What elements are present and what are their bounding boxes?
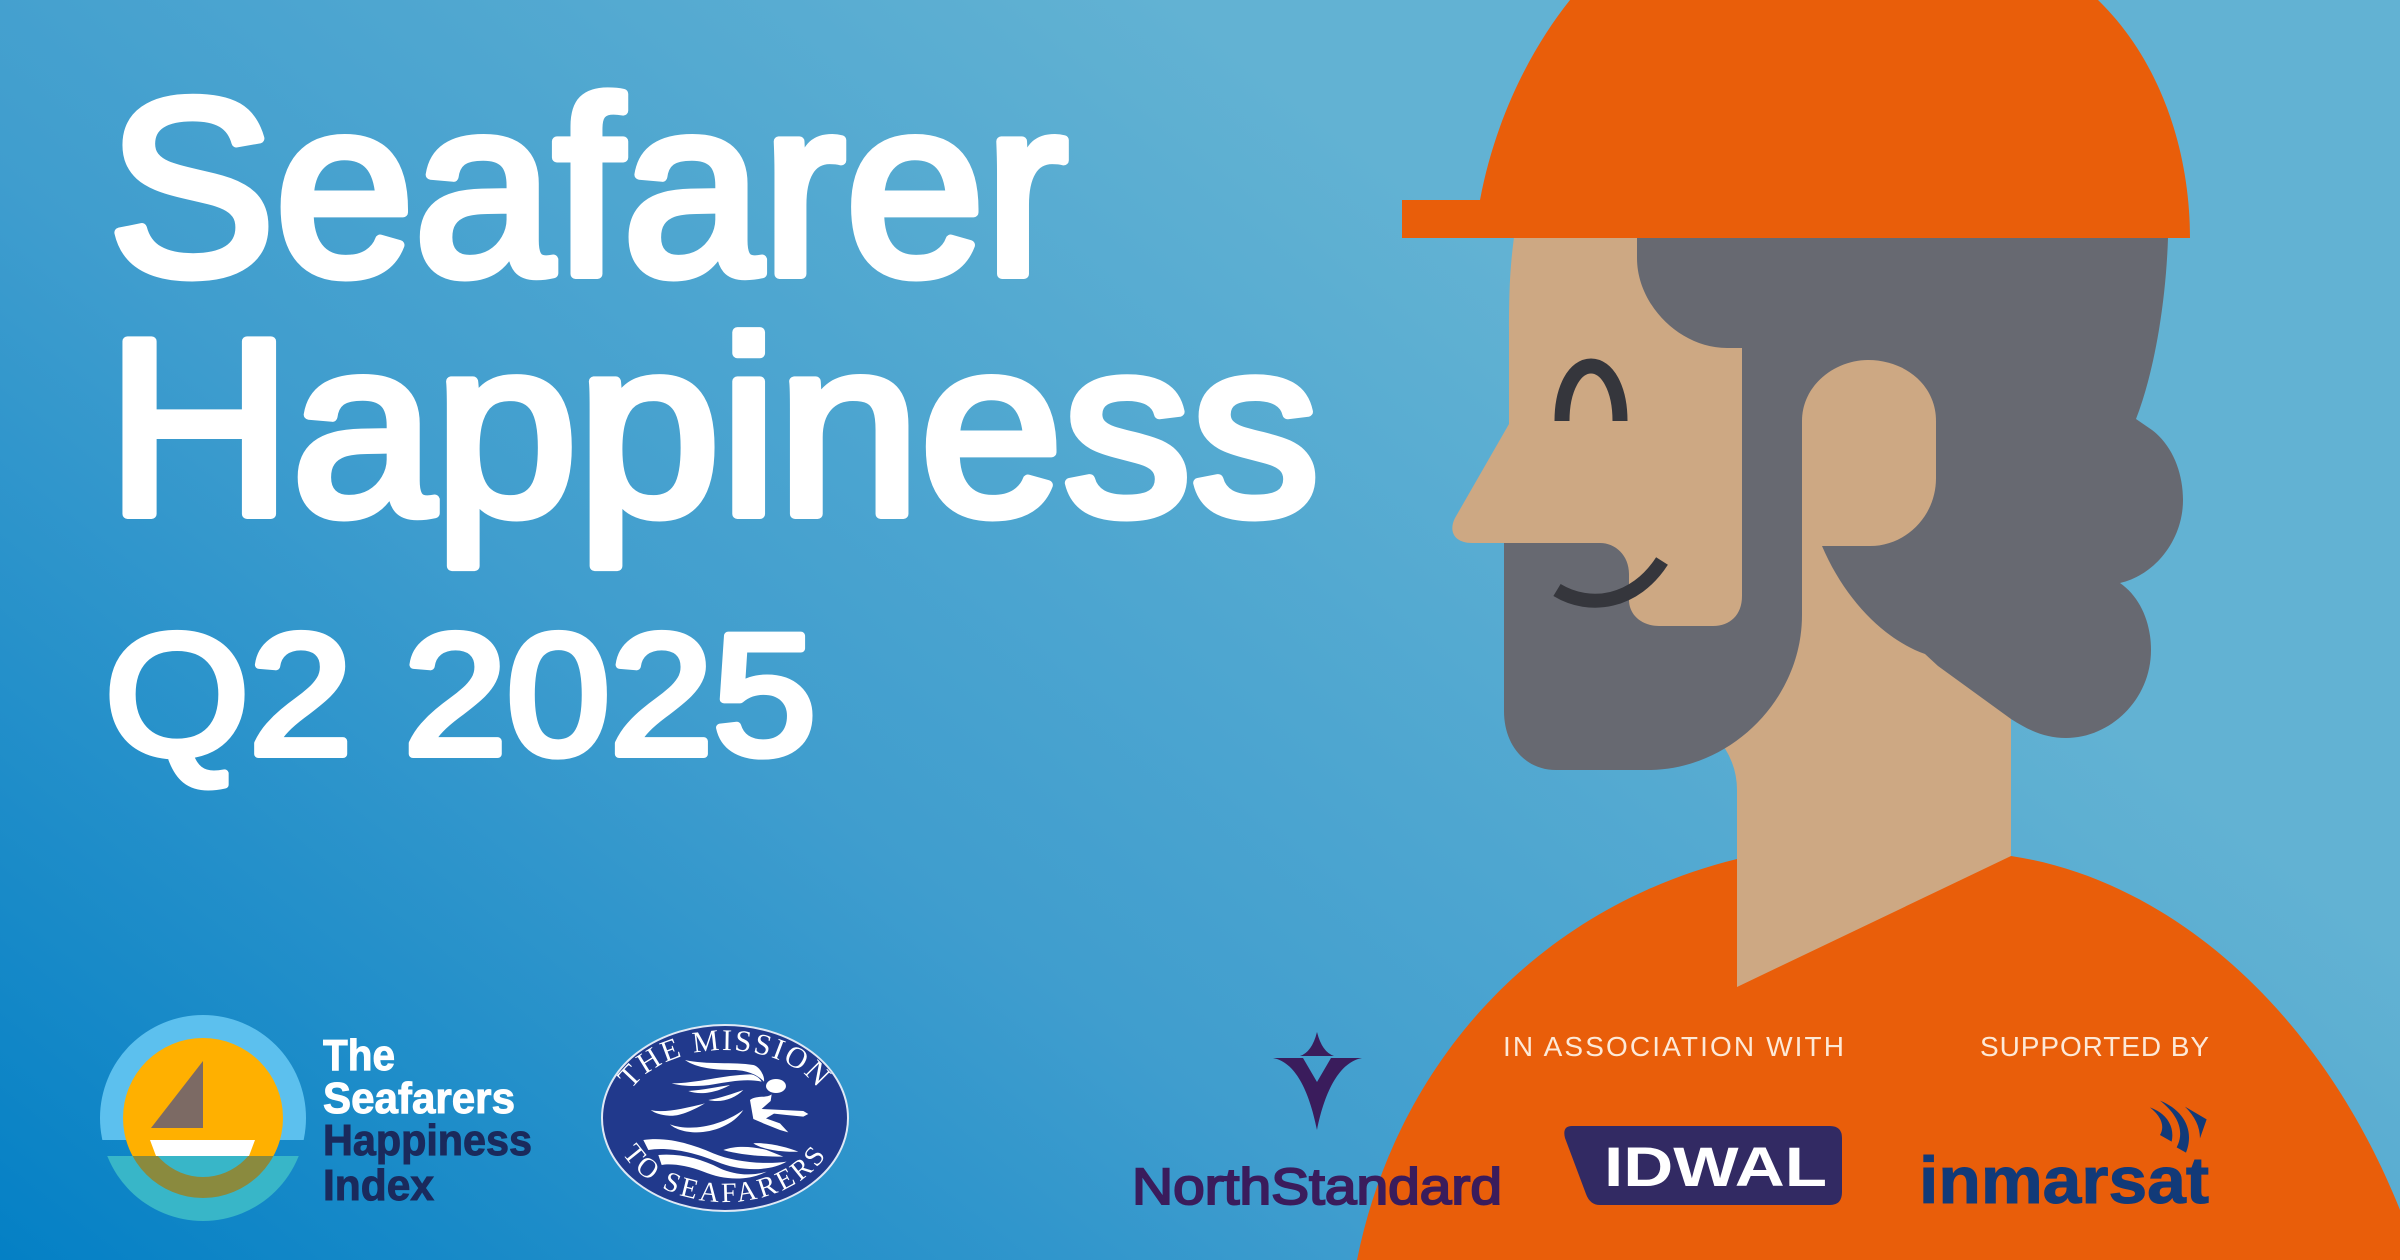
label: supported by: SUPPORTED BY <box>1980 1031 2209 1062</box>
hard hat <box>1402 0 2190 238</box>
logo wordmark: The <box>323 1031 395 1080</box>
title line: Seafarer: Seafarer <box>108 48 1068 328</box>
shirt <box>1357 856 2400 1260</box>
ear <box>1802 360 1936 546</box>
title line: Happiness: Happiness <box>106 288 1320 568</box>
logo wordmark: Seafarers <box>323 1074 515 1123</box>
NorthStandard wordmark: NorthStandard <box>1132 1158 1502 1215</box>
logo emblem: sailboat <box>100 1015 306 1221</box>
hair and beard <box>1504 230 2183 770</box>
flying angel emblem <box>643 1060 808 1179</box>
neck <box>1715 530 2011 987</box>
NorthStandard star <box>1273 1032 1362 1130</box>
logo: The Seafarers Happiness Index <box>100 1015 532 1221</box>
subtitle: Q2 2025: Q2 2025 <box>105 599 816 791</box>
inmarsat wordmark: inmarsat <box>1919 1143 2209 1217</box>
label: in association with: IN ASSOCIATION WITH <box>1503 1031 1844 1062</box>
IDWAL wordmark: IDWAL <box>1604 1135 1827 1198</box>
logo: IDWAL <box>1564 1126 1842 1205</box>
logo wordmark: Index <box>323 1161 435 1210</box>
logo: NorthStandard <box>1132 1032 1502 1215</box>
eye <box>1562 366 1620 421</box>
smile <box>1557 561 1662 601</box>
mission text top: THE MISSION <box>616 1030 832 1086</box>
logo wordmark: Happiness <box>323 1116 532 1165</box>
logo wordmark <box>323 1031 532 1210</box>
inmarsat signal waves <box>2150 1101 2207 1153</box>
title <box>105 48 1320 791</box>
mission text bottom: TO SEAFARERS <box>624 1142 824 1202</box>
logo: inmarsat <box>1919 1101 2209 1217</box>
logo: The Mission to Seafarers <box>601 1024 849 1212</box>
illustration: seafarer portrait <box>1357 0 2400 1260</box>
face <box>1452 230 1742 626</box>
